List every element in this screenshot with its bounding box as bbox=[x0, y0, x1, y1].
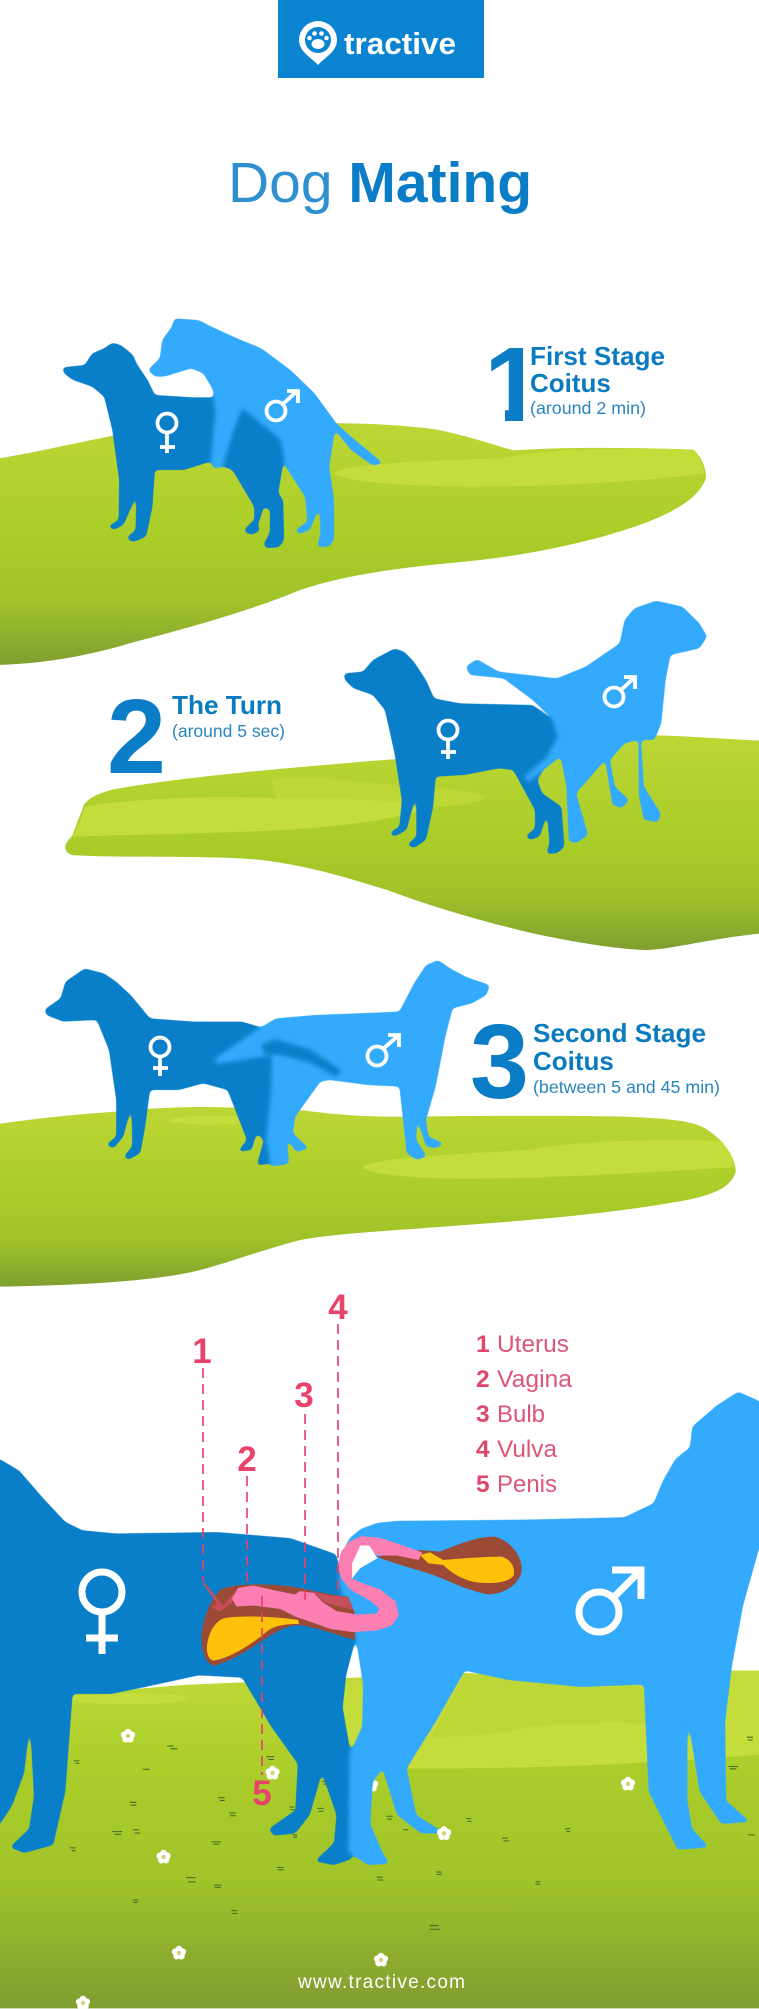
icon: female symbol bbox=[82, 1572, 122, 1654]
duration: (between 5 and 45 min) bbox=[533, 1077, 720, 1097]
stage 2 label bbox=[107, 678, 285, 796]
icon: male symbol bbox=[604, 677, 635, 706]
step number: 2 bbox=[107, 678, 166, 796]
female dog silhouette bbox=[45, 968, 272, 1166]
icon: male symbol bbox=[266, 391, 298, 420]
flowers bbox=[76, 1729, 635, 2009]
male organ bbox=[377, 1537, 522, 1594]
heading: First Stage bbox=[530, 341, 665, 371]
scene: the turn dogs bbox=[344, 601, 707, 854]
callout numbers: 3 bbox=[294, 1376, 314, 1415]
icon: location pin with paw bbox=[299, 21, 337, 65]
legend: Uterus bbox=[497, 1331, 569, 1358]
penis bbox=[233, 1537, 422, 1632]
legend: 4 bbox=[476, 1436, 490, 1463]
icon: female symbol bbox=[150, 1038, 170, 1076]
male dog silhouette bbox=[215, 960, 490, 1167]
step number: 3 bbox=[470, 1003, 529, 1121]
male dog silhouette bbox=[466, 601, 707, 843]
flower behind male dog bbox=[364, 1778, 378, 1792]
icon: female symbol bbox=[438, 720, 458, 759]
female dog silhouette bbox=[62, 343, 284, 548]
step number: 1 bbox=[484, 326, 543, 444]
callout numbers: 1 bbox=[192, 1332, 212, 1371]
legend bbox=[476, 1331, 572, 1498]
icon: male symbol bbox=[579, 1570, 641, 1632]
logo badge bbox=[278, 0, 484, 78]
scene: the turn ground bbox=[65, 735, 759, 950]
legend: Vulva bbox=[497, 1436, 557, 1463]
female tail overlap bbox=[261, 1039, 342, 1077]
callout dashed lines bbox=[203, 1324, 338, 1775]
grass tufts bbox=[70, 1737, 755, 1929]
female dog silhouette bbox=[0, 1459, 356, 1865]
female dog silhouette bbox=[344, 648, 564, 854]
heading: The Turn bbox=[172, 690, 282, 720]
callout numbers: 4 bbox=[328, 1288, 348, 1327]
scene: first stage ground bbox=[0, 423, 706, 665]
callout numbers bbox=[192, 1288, 348, 1813]
duration: (around 2 min) bbox=[530, 398, 646, 418]
anatomy organs bbox=[202, 1537, 522, 1666]
callout numbers: 5 bbox=[252, 1774, 272, 1813]
scene: anatomy ground bbox=[0, 1671, 759, 2008]
icon: male symbol bbox=[368, 1035, 399, 1066]
legend: Bulb bbox=[497, 1401, 545, 1428]
legend: 2 bbox=[476, 1366, 490, 1393]
legend: 3 bbox=[476, 1401, 490, 1428]
heading: Second Stage bbox=[533, 1018, 706, 1048]
scene: second stage dogs bbox=[45, 960, 490, 1167]
legend: Vagina bbox=[497, 1366, 572, 1393]
legend: 5 bbox=[476, 1471, 490, 1498]
legend: 1 bbox=[476, 1331, 490, 1358]
male dog silhouette bbox=[339, 1392, 759, 1865]
duration: (around 5 sec) bbox=[172, 721, 285, 741]
white gap bbox=[351, 1545, 377, 1579]
stage 3 label bbox=[470, 1003, 720, 1121]
male dog silhouette bbox=[148, 318, 383, 547]
icon: female symbol bbox=[158, 414, 176, 453]
scene: anatomy dogs bbox=[0, 1392, 759, 1865]
stage 1 label bbox=[491, 346, 664, 421]
uterus horn bbox=[203, 1582, 235, 1612]
footer url: www.tractive.com bbox=[297, 1972, 465, 1993]
legend: Penis bbox=[497, 1471, 557, 1498]
scene: second stage ground bbox=[0, 1107, 736, 1287]
stage 1 label: Coitus bbox=[530, 368, 611, 398]
scene: first stage dogs bbox=[62, 318, 383, 548]
title: Dog Mating bbox=[228, 151, 532, 215]
stage 3 label: Coitus bbox=[533, 1046, 614, 1076]
female organ bbox=[202, 1584, 355, 1666]
callout numbers: 2 bbox=[237, 1440, 257, 1479]
logo wordmark: tractive bbox=[344, 26, 456, 61]
